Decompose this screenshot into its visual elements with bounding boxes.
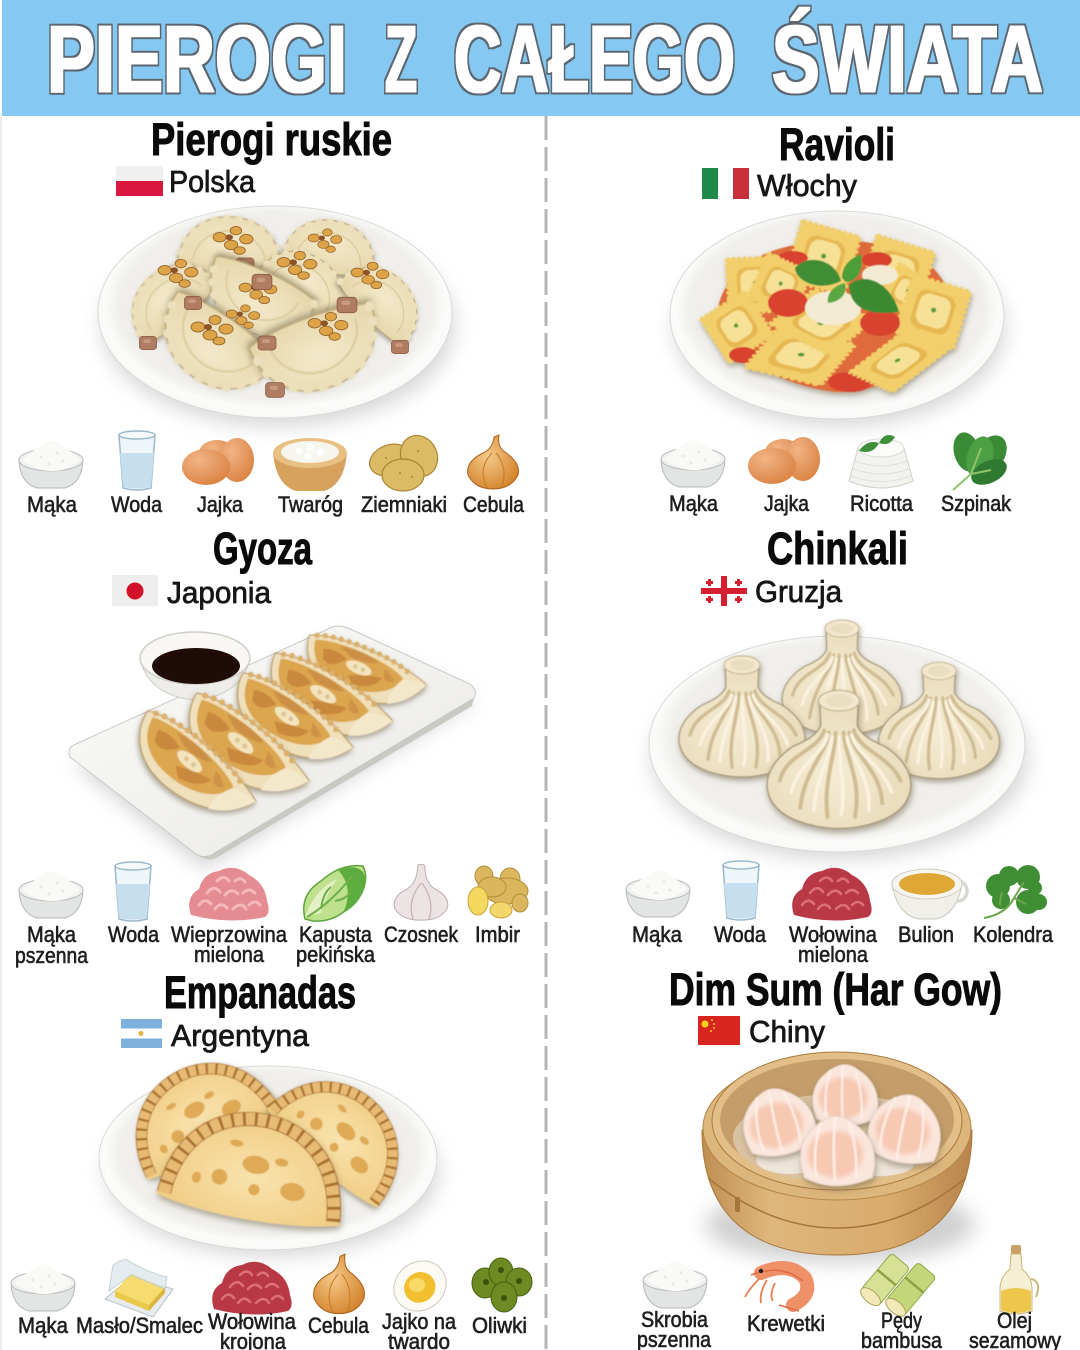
heading: Gyoza: [213, 523, 313, 574]
ingredient: Mąka: [19, 441, 83, 517]
ingredient: Mąka: [661, 440, 725, 516]
ingredient: Cebula: Cebula: [463, 492, 525, 517]
ingredient: Jajka: [182, 438, 254, 517]
ingredient: Wołowina mielona: mielona: [798, 942, 869, 967]
ingredient: Mąka: Mąka: [669, 491, 719, 516]
ingredient: Bulion: Bulion: [898, 922, 954, 947]
ingredient: Mąka pszenna: Mąka: [27, 922, 77, 947]
panel: Dim Sum (Har Gow): [637, 964, 1061, 1350]
plate of empanadas: [99, 1036, 438, 1256]
ingredient: Kapusta pekińska: pekińska: [296, 942, 376, 967]
ingredient: Krewetki: Krewetki: [747, 1311, 825, 1336]
ingredient row: [19, 429, 525, 517]
flag: Włochy: [702, 168, 749, 199]
soy sauce bowl: [140, 632, 250, 700]
plate of pierogi: [98, 206, 454, 426]
ingredient: Szpinak: [941, 429, 1013, 516]
ingredient row: [661, 429, 1013, 516]
plate of ravioli: [670, 211, 1005, 426]
ingredient: Kapusta pekińska: Kapusta: [299, 922, 373, 947]
country: Argentyna: [171, 1018, 310, 1053]
ingredient: Ricotta: Ricotta: [850, 491, 914, 516]
ingredient: Ziemniaki: Ziemniaki: [361, 492, 447, 517]
ingredient: Wołowina mielona: Wołowina: [789, 922, 878, 947]
title: Z: [385, 6, 417, 113]
ingredient: Wołowina mielona: [789, 868, 878, 967]
heading: Dim Sum (Har Gow): [669, 964, 1002, 1015]
ingredient: Oliwki: Oliwki: [472, 1313, 527, 1338]
ingredient: Woda: Woda: [108, 922, 160, 947]
title: PIEROGI: [47, 6, 347, 113]
ingredient: Woda: [108, 862, 160, 947]
heading: Ravioli: [779, 119, 895, 170]
ingredient: Imbir: Imbir: [475, 922, 520, 947]
panel: Ravioli: [661, 119, 1013, 516]
ingredient: Masło/Smalec: [76, 1260, 203, 1338]
ingredient: Jajko na twardo: [382, 1251, 457, 1350]
ingredient: Wołowina krojona: Wołowina: [208, 1309, 297, 1334]
rectangular plate of gyoza: [69, 626, 475, 868]
ingredient row: [637, 1245, 1061, 1350]
center divider: [544, 116, 548, 1350]
plate of chinkali: [649, 620, 1028, 859]
ingredient: Cebula: Cebula: [308, 1313, 370, 1338]
ingredient: Woda: [714, 861, 767, 947]
ingredient row: [626, 861, 1054, 967]
ingredient: Olej sezamowy: Olej: [997, 1308, 1032, 1333]
heading: Chinkali: [767, 523, 908, 574]
ingredient: Cebula: [463, 435, 525, 517]
ingredient: Pędy bambusa: Pędy: [881, 1308, 922, 1333]
country: Włochy: [757, 168, 857, 203]
bamboo steamer with har gow: [702, 1052, 975, 1263]
country: Chiny: [749, 1014, 825, 1049]
ingredient: Olej sezamowy: [969, 1245, 1061, 1350]
ingredient: Wieprzowina mielona: Wieprzowina: [171, 922, 288, 947]
ingredient row: [11, 1251, 532, 1350]
country: Polska: [169, 164, 256, 199]
flag: Argentyna: [121, 1019, 162, 1048]
ingredient: Ricotta: [849, 435, 914, 516]
header band: [2, 0, 1080, 116]
ingredient: Krewetki: [745, 1268, 825, 1336]
panel: Empanadas: [11, 967, 532, 1350]
flag: Chiny: [698, 1016, 740, 1045]
ingredient: Mąka: [11, 1264, 75, 1338]
ingredient: Mąka pszenna: [15, 871, 89, 968]
ingredient: Wieprzowina mielona: mielona: [194, 942, 265, 967]
flag: Japonia: [112, 575, 158, 606]
ingredient: Kolendra: [973, 865, 1054, 947]
heading: Empanadas: [164, 967, 356, 1018]
ingredient: Imbir: [468, 866, 528, 947]
ingredient: Mąka: Mąka: [27, 492, 78, 517]
ingredient: Wołowina krojona: [208, 1262, 297, 1350]
title: CAŁEGO: [454, 6, 735, 113]
ingredient: Cebula: [308, 1254, 370, 1338]
ingredient: Mąka: Mąka: [18, 1313, 69, 1338]
ingredient: Jajka: Jajka: [764, 491, 810, 516]
ingredient: Szpinak: Szpinak: [941, 491, 1012, 516]
ingredient: Woda: Woda: [111, 492, 163, 517]
ingredient: Oliwki: [472, 1258, 532, 1338]
ingredient: Jajka: Jajka: [197, 492, 244, 517]
ingredient: Woda: [111, 431, 163, 517]
ingredient: Woda: Woda: [714, 922, 767, 947]
country: Gruzja: [755, 574, 843, 609]
ingredient: Pędy bambusa: [858, 1245, 943, 1350]
flag: Polska: [116, 166, 163, 196]
ingredient: Twaróg: [273, 438, 347, 517]
ingredient: Mąka: Mąka: [632, 922, 683, 947]
panel: Gyoza: [15, 523, 528, 968]
heading: Pierogi ruskie: [151, 114, 392, 165]
ingredient row: [15, 862, 528, 968]
ingredient: Kapusta pekińska: [296, 866, 376, 967]
panel: Chinkali: [626, 523, 1054, 967]
ingredient: Czosnek: [384, 864, 459, 947]
ingredient: Twaróg: Twaróg: [278, 492, 343, 517]
ingredient: Bulion: [892, 869, 967, 947]
ingredient: Wieprzowina mielona: [171, 868, 288, 967]
ingredient: Skrobia pszenna: Skrobia: [641, 1307, 709, 1332]
ingredient: Kolendra: Kolendra: [973, 922, 1054, 947]
country: Japonia: [167, 575, 272, 610]
ingredient: Masło/Smalec: Masło/Smalec: [76, 1313, 203, 1338]
title: [47, 6, 1043, 113]
ingredient: Jajko na twardo: Jajko na: [382, 1309, 457, 1334]
ingredient: Skrobia pszenna: [637, 1261, 712, 1350]
ingredient: Jajka: [748, 437, 820, 516]
ingredient: Ziemniaki: [361, 429, 447, 517]
ingredient: Mąka: [626, 870, 690, 947]
panel: Pierogi ruskie: [19, 114, 525, 517]
ingredient: Czosnek: Czosnek: [384, 922, 459, 947]
flag: Gruzja: [701, 576, 747, 606]
ingredient: Mąka pszenna: pszenna: [15, 943, 89, 968]
